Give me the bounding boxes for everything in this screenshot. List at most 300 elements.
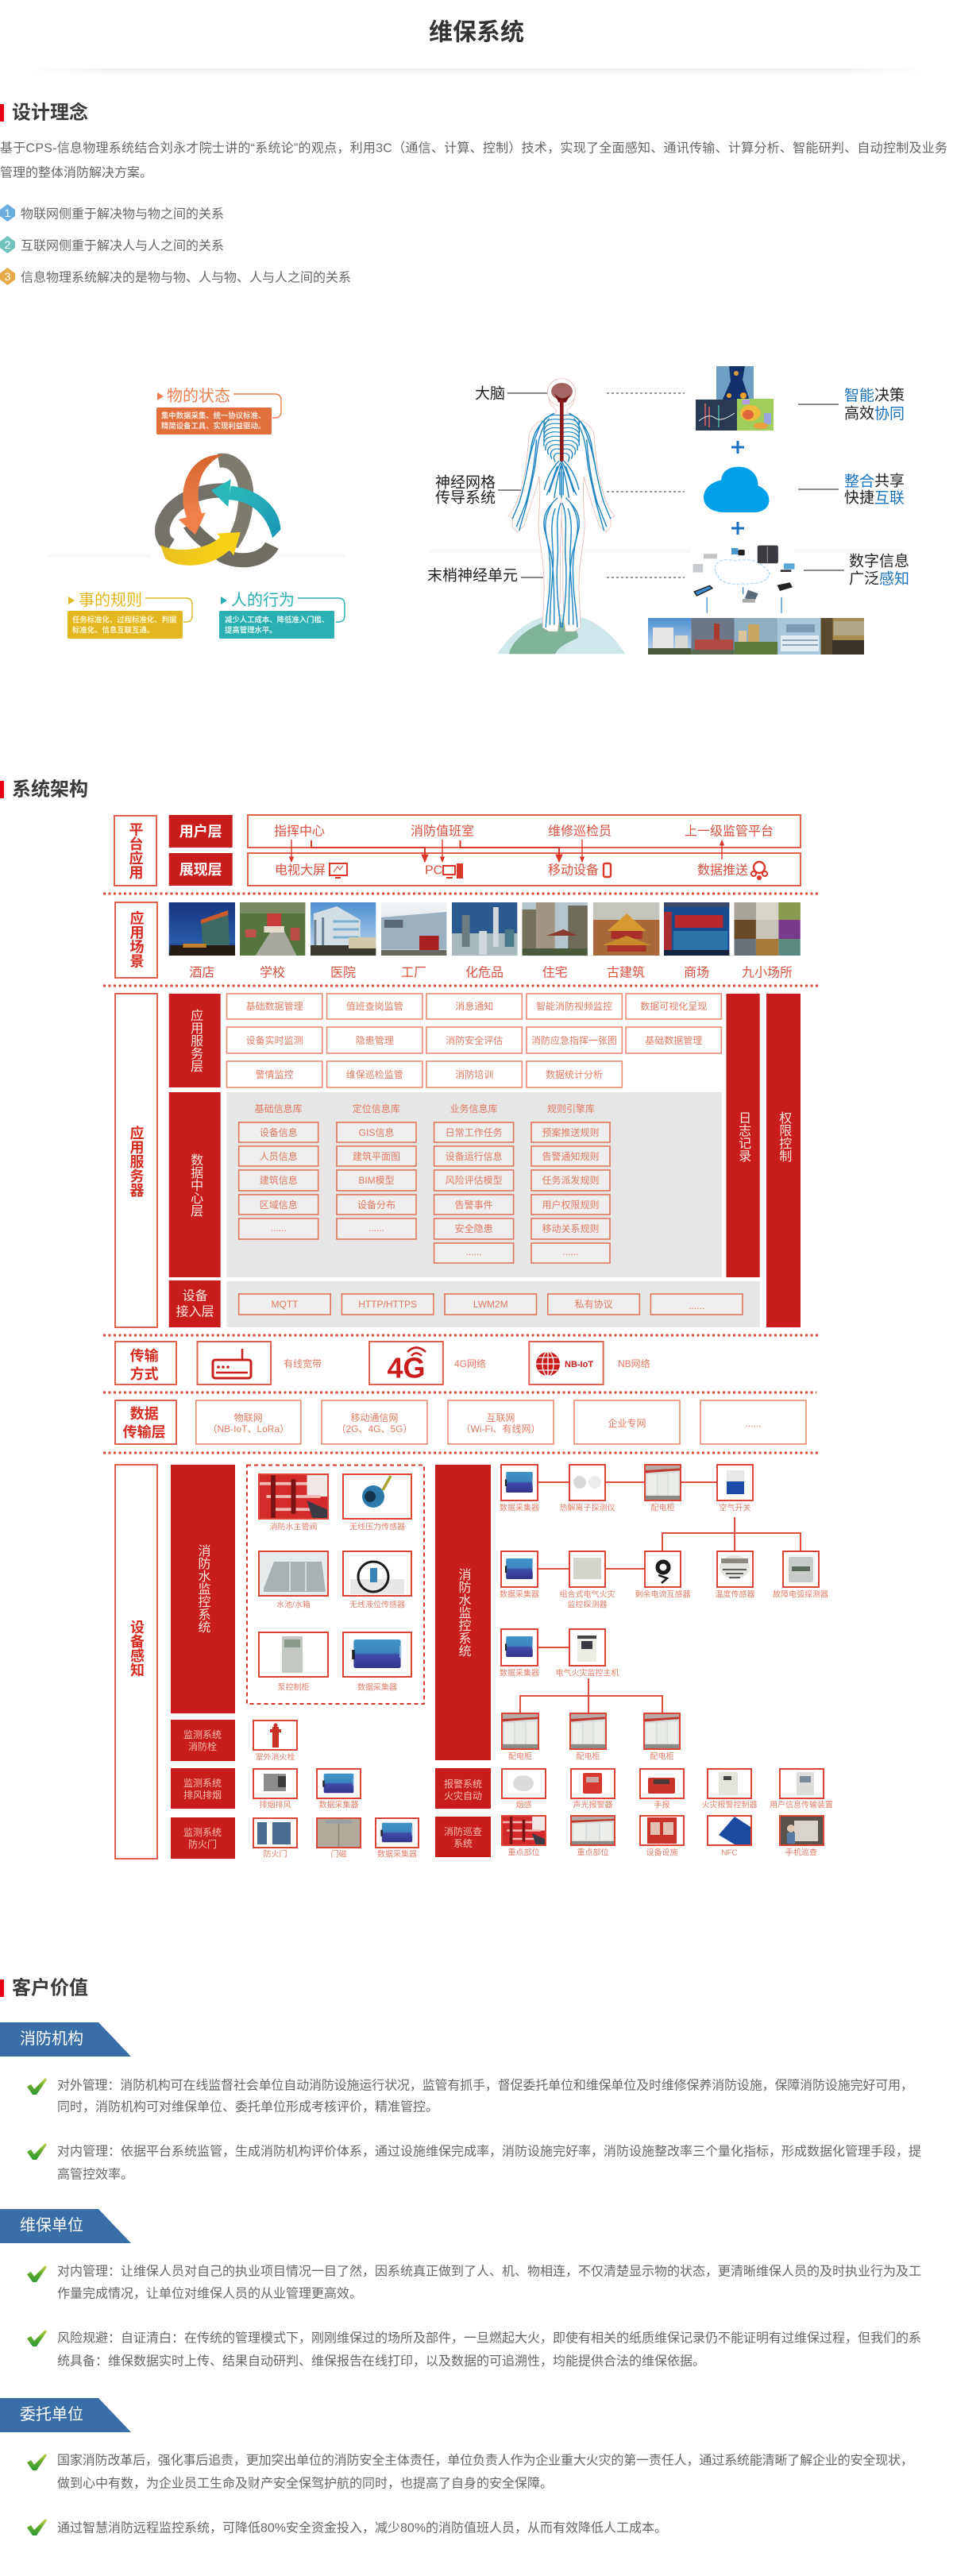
callout: 物的状态 [156, 387, 281, 434]
device: 消防水主管阀: 消防水主管阀 [270, 1522, 318, 1531]
device: 防火门: 防火门 [264, 1849, 287, 1859]
intro paragraph [0, 140, 947, 180]
right column: 消防巡查系统: 消防巡查 [444, 1825, 482, 1837]
item: 国家消防改革: 做到心中有数，为企业员工生命及财产安全保驾护航的同时，也提高了自身的安全保障。 [57, 2477, 553, 2491]
device: 声光报警器 [571, 1769, 615, 1809]
device: 用户信息传输装置: 用户信息传输装置 [770, 1800, 833, 1809]
column: 定位信息库: 定位信息库 [353, 1103, 400, 1114]
icon: analytics image cluster [696, 366, 774, 431]
label: 数字信息 广泛感知: 数字信息 [849, 553, 909, 570]
protocol panel: MQTT [272, 1299, 299, 1310]
icon: mobile device [604, 863, 611, 877]
service modules: 设备实时监测 [246, 1034, 303, 1046]
photo: 古建筑: 古建筑 [607, 966, 645, 980]
panel: 应用服务器 [115, 994, 801, 1327]
device: 数据采集器 [500, 1551, 539, 1600]
bar: 日志记录: 日志记录 [736, 1111, 751, 1162]
icon: plus 1 [731, 441, 744, 454]
icon: data push [751, 862, 767, 880]
network: 移动通信网: （2G、4G、5G） [336, 1423, 413, 1435]
section heading: 设计理念: 设计理念 [12, 102, 88, 124]
device: 手机巡查: 手机巡查 [785, 1848, 817, 1857]
tag: 委托单位 [0, 2398, 131, 2432]
label: 平台应用: 平台应用 [127, 822, 143, 880]
layer: 设备接入层: 接入层 [176, 1304, 214, 1319]
callout: 事的规则 [68, 591, 192, 639]
device: NFC: NFC [721, 1849, 738, 1857]
column: 规则引擎库: 移动关系规则 [542, 1222, 600, 1234]
item: 国家消防改革: 国家消防改革后，强化事后追责，更加突出单位的消防安全主体责任，单位负责人作为企业重大火灾的第一责任人，通过系统能清晰了解企业的安全现状， [57, 2453, 913, 2467]
user row: 维修巡检员 [548, 825, 612, 839]
device: 重点部位: 重点部位 [577, 1848, 608, 1857]
label: 传输方式: 传输 [130, 1347, 159, 1364]
protocol panel: 私有协议 [575, 1298, 613, 1310]
label: 传输方式: 方式 [130, 1365, 159, 1382]
photo: 化危品: 化危品 [465, 966, 504, 980]
device: 温度传感器: 温度传感器 [715, 1589, 754, 1600]
item: 风险规避 [27, 2330, 921, 2369]
device: 热解离子探测仪: 热解离子探测仪 [559, 1503, 615, 1512]
item: 对外管理: 同时，消防机构可对维保单位、委托单位形成考核评价，精准管控。 [57, 2100, 438, 2114]
device: 泵控制柜 [259, 1632, 328, 1692]
display row: 移动设备 [548, 863, 599, 877]
service modules: 基础数据管理 [645, 1034, 702, 1046]
illustration: human body with nerve network [508, 379, 615, 631]
photo: 九小场所: 九小场所 [742, 966, 793, 980]
layer: 用户层 [169, 815, 233, 848]
callout: 物的状态: 精简设备工具、实现利益驱动。 [161, 421, 265, 431]
device: 声光报警器: 声光报警器 [573, 1800, 613, 1809]
icon: cloud [704, 467, 769, 512]
network: 物联网: （NB-IoT、LoRa） [207, 1423, 289, 1435]
photo: 住宅 [523, 902, 588, 980]
label: 数据传输层 [115, 1400, 176, 1444]
right column: 报警系统火灾自动: 火灾自动 [444, 1790, 482, 1802]
device: 室外消火栓: 室外消火栓 [256, 1752, 295, 1762]
callout: 物的状态: 集中数据采集、统一协议标准、 [161, 411, 265, 419]
device: 设备设施: 设备设施 [646, 1848, 678, 1857]
device: 防火门 [253, 1818, 297, 1859]
right column: 报警系统火灾自动: 报警系统 [444, 1778, 482, 1790]
list item 3: 信息物理系统解决的是物与物、人与物、人与人之间的关系 [21, 270, 351, 284]
left column: 监测系统消防栓: 消防栓 [188, 1740, 217, 1752]
column: 业务信息库 [434, 1103, 514, 1263]
network: 互联网: 互联网 [486, 1412, 515, 1423]
label: 设备感知 [115, 1465, 157, 1859]
photo: 商场 [664, 902, 729, 980]
protocol panel: HTTP/HTTPS [358, 1299, 417, 1310]
service modules: 消息通知 [455, 1000, 493, 1012]
column: 基础信息库: ...... [271, 1222, 287, 1234]
device: 数据采集器 [343, 1632, 411, 1692]
network: 互联网: （Wi-Fi、有线网） [461, 1423, 540, 1435]
service modules: 消防应急指挥一张图 [531, 1034, 617, 1046]
bar: 权限控制: 权限控制 [777, 1111, 792, 1162]
bar: 日志记录 [726, 994, 760, 1277]
layer: 展现层: 展现层 [179, 862, 222, 878]
callout: 人的行为: 减少人工成本、降低准入门槛、 [225, 615, 329, 624]
device: 故障电弧探测器 [773, 1551, 828, 1600]
device: 手报 [640, 1769, 684, 1809]
photo: 工厂: 工厂 [401, 966, 426, 980]
device: 温度传感器 [715, 1551, 754, 1600]
layer: 数据中心层: 数据中心层 [188, 1153, 203, 1217]
intro paragraph: 管理的整体消防解决方案。 [0, 165, 152, 180]
label: 整合共享 快捷互联: 整合共享 [844, 472, 905, 489]
column: 规则引擎库: 预案推送规则 [542, 1126, 600, 1138]
item: 对内管理: 高管控效率。 [57, 2167, 133, 2181]
column: 定位信息库: 建筑平面图 [353, 1150, 400, 1162]
label: 末梢神经单元: 末梢神经单元 [427, 567, 518, 585]
item: 风险规避: 统具备：维保数据实时上传、结果自动研判、维保报告在线打印，以及数据的可追溯性，均能提供合法的维保依据。 [57, 2354, 705, 2369]
device: 数据采集器: 数据采集器 [500, 1668, 539, 1678]
callout: 物的状态: 物的状态 [167, 387, 230, 405]
diagram: human nervous system analogy [427, 366, 909, 655]
photo: 酒店: 酒店 [189, 966, 214, 980]
icon: router, wired broadband: 有线宽带 [284, 1358, 322, 1369]
device: 数据采集器: 数据采集器 [500, 1503, 539, 1512]
service modules: 数据统计分析 [546, 1068, 603, 1080]
label: 数字信息 广泛感知: 广泛感知 [849, 570, 909, 588]
device: 剩余电流互感器 [635, 1551, 691, 1600]
photo: 医院 [311, 902, 376, 980]
label: 智能决策 高效协同 [798, 386, 905, 423]
column: 业务信息库: ...... [466, 1246, 482, 1257]
label: 智能决策 高效协同: 智能决策 [844, 386, 905, 404]
device: 无线压力传感器 [343, 1474, 411, 1531]
list item 2: 互联网侧重于解决人与人之间的关系 [21, 238, 224, 253]
network: 互联网 [448, 1400, 554, 1444]
icon: PC [443, 863, 463, 879]
protocol panel: ...... [689, 1300, 704, 1311]
device: 室外消火栓 [253, 1721, 297, 1762]
device: 数据采集器: 数据采集器 [319, 1800, 359, 1809]
column: 定位信息库: BIM模型 [358, 1175, 395, 1186]
column: 定位信息库: GIS信息 [359, 1126, 394, 1138]
device: 配电柜 [644, 1713, 680, 1762]
right column: 消防巡查系统 [435, 1816, 824, 1857]
device: 无线液位传感器 [343, 1551, 411, 1609]
callout: 人的行为: 人的行为 [231, 591, 295, 609]
icon: plus 2 [731, 522, 744, 535]
panel: 应用场景 [115, 902, 801, 980]
service modules: 隐患管理 [356, 1034, 394, 1046]
device: NFC [708, 1816, 751, 1857]
device: 用户信息传输装置 [770, 1769, 833, 1809]
column: 业务信息库: 风险评估模型 [446, 1174, 503, 1186]
device: 数据采集器 [317, 1769, 361, 1809]
column: 规则引擎库: 告警通知规则 [542, 1150, 600, 1162]
device: 重点部位 [571, 1816, 615, 1857]
item: 对内管理 维保: 作量完成情况，让单位对维保人员的从业管理更高效。 [57, 2286, 362, 2300]
column: 业务信息库: 设备运行信息 [446, 1150, 503, 1162]
icon: 4G [369, 1342, 486, 1385]
device: 空气开关 [717, 1465, 753, 1512]
column: 业务信息库: 安全隐患 [455, 1222, 493, 1234]
column: 规则引擎库 [531, 1103, 610, 1263]
list item 3: 3 [5, 270, 11, 283]
label: 智能决策 高效协同: 高效协同 [844, 405, 905, 423]
panel: 平台应用 [114, 815, 801, 886]
item: 对内管理 维保 [27, 2264, 921, 2300]
device: 手机巡查 [780, 1816, 824, 1857]
device: 重点部位 [502, 1816, 546, 1857]
network: 移动通信网 [322, 1400, 427, 1444]
label: 神经网格传导系统: 传导系统 [435, 489, 496, 507]
device: 设备设施 [640, 1816, 684, 1857]
device: 剩余电流互感器: 剩余电流互感器 [635, 1589, 691, 1600]
label: 应用场景: 应用场景 [129, 910, 145, 967]
column: 基础信息库: 建筑信息 [260, 1174, 298, 1186]
label: 应用场景 [115, 902, 157, 978]
panel: 传输方式 [115, 1342, 650, 1385]
layer: 数据中心层 [169, 1092, 721, 1277]
photo: 酒店 [169, 902, 235, 980]
display row [248, 853, 801, 886]
icon: 4G: 4G [387, 1352, 426, 1384]
device: 故障电弧探测器: 故障电弧探测器 [773, 1589, 828, 1600]
list item 2: 2 [5, 238, 11, 251]
service modules: 消防安全评估 [446, 1034, 503, 1046]
left column: 监测系统消防栓: 监测系统 [183, 1729, 222, 1740]
column: 基础信息库 [239, 1103, 318, 1239]
layer: 展现层 [169, 853, 233, 886]
list item 1: 1 [5, 207, 11, 219]
panel: 数据传输层 [115, 1400, 806, 1444]
photo strip: buildings [648, 618, 864, 655]
system block: 消防水监控系统 [456, 1568, 472, 1657]
photo: 九小场所 [734, 902, 801, 980]
panel: 设备感知 [115, 1465, 833, 1859]
illustration: globe [497, 614, 625, 654]
protocol panel: LWM2M [473, 1299, 508, 1310]
left column: 监测系统排风排烟 [171, 1768, 361, 1809]
device: 数据采集器 [376, 1818, 419, 1859]
tag: 委托单位: 委托单位 [20, 2405, 83, 2423]
device: 数据采集器: 数据采集器 [377, 1849, 417, 1859]
photo: 化危品 [452, 902, 517, 980]
device: 热解离子探测仪 [559, 1465, 615, 1512]
label: 应用服务器: 应用服务器 [129, 1125, 145, 1197]
icon: 4G: 4G网络 [454, 1358, 486, 1369]
item: 对内管理 [27, 2143, 921, 2181]
display row: 数据推送 [697, 863, 748, 877]
label: 设备感知: 设备感知 [129, 1620, 145, 1677]
device: 配电柜: 配电柜 [577, 1751, 600, 1762]
item: 对内管理 维保: 对内管理：让维保人员对自己的执业项目情况一目了然，因系统真正做到了人、机、物相连，不仅清楚显示物的状态，更清晰维保人员的及时执业行为及工 [57, 2264, 921, 2278]
device: 消防水主管阀 [259, 1474, 328, 1531]
intro paragraph: 基于CPS-信息物理系统结合刘永才院士讲的“系统论”的观点，利用3C（通信、计算、控制）技术，实现了全面感知、通讯传输、计算分析、智能研判、自动控制及业务 [0, 140, 947, 156]
left column: 监测系统排风排烟: 排风排烟 [183, 1790, 222, 1801]
right column: 消防水监控系统 [435, 1465, 828, 1762]
left column: 监测系统防火门: 监测系统 [183, 1827, 222, 1838]
column: 基础信息库: 人员信息 [260, 1150, 298, 1162]
layer: 应用服务层 [169, 994, 721, 1087]
device: 火灾报警控制器: 火灾报警控制器 [702, 1800, 758, 1809]
bar: 权限控制 [766, 994, 801, 1327]
callout: 事的规则: 事的规则 [79, 591, 142, 609]
user row [248, 815, 801, 848]
arrows: user to display [291, 840, 722, 862]
device: 排烟排风 [253, 1769, 297, 1809]
device: 烟感 [502, 1769, 546, 1809]
network: 物联网: 物联网 [234, 1412, 263, 1423]
label: 整合共享 快捷互联: 快捷互联 [844, 489, 905, 507]
callout: 人的行为 [219, 591, 345, 639]
protocol panel [227, 1281, 760, 1327]
device: 水池/水箱: 水池/水箱 [276, 1600, 311, 1609]
item: 远程监控: 通过智慧消防远程监控系统，可降低80%安全资金投入，减少80%的消防值班人员，从而有效降低人工成本。 [57, 2521, 667, 2535]
icon: NB-IoT: NB-IoT [565, 1360, 593, 1369]
title: 维保系统 [429, 19, 524, 46]
device: 火灾报警控制器 [702, 1769, 758, 1809]
item: 对外管理: 对外管理：消防机构可在线监督社会单位自动消防设施运行状况，监管有抓手，督促委托单位和维保单位及时维修保养消防设施，保障消防设施完好可用， [57, 2078, 913, 2092]
device: 泵控制柜: 泵控制柜 [278, 1682, 310, 1692]
column: 业务信息库: 日常工作任务 [446, 1126, 503, 1138]
icon: tri-colour ribbon arrows [160, 454, 280, 566]
column: 基础信息库: 区域信息 [260, 1199, 298, 1211]
label: 数据传输层: 传输层 [123, 1423, 166, 1440]
device: 数据采集器: 数据采集器 [357, 1682, 397, 1692]
service modules: 数据可视化呈现 [640, 1000, 707, 1012]
user row: 上一级监管平台 [685, 825, 774, 839]
section heading: 系统架构: 系统架构 [12, 778, 88, 801]
network: 企业专网 [574, 1400, 680, 1444]
photo: 学校 [240, 902, 305, 980]
device: 排烟排风: 排烟排风 [259, 1800, 291, 1809]
tag: 维保单位: 维保单位 [20, 2216, 83, 2234]
network: more: ...... [745, 1418, 762, 1429]
device: 配电柜: 配电柜 [508, 1751, 532, 1762]
column: 定位信息库: ...... [368, 1222, 384, 1234]
right column: 消防巡查系统: 系统 [453, 1838, 473, 1849]
item: 国家消防改革 [27, 2453, 913, 2491]
icon: NB-IoT [529, 1342, 650, 1385]
photo: 商场: 商场 [684, 966, 709, 980]
device: 组合式电气火灾监控探测器 [559, 1551, 615, 1609]
label: 大脑: 大脑 [475, 384, 505, 402]
column: 定位信息库: 设备分布 [357, 1199, 395, 1211]
service modules: 值班查岗监管 [346, 1000, 403, 1012]
device: 数据采集器 [500, 1465, 539, 1512]
column: 规则引擎库: 用户权限规则 [542, 1199, 600, 1211]
column: 基础信息库: 基础信息库 [255, 1103, 303, 1114]
network: more [700, 1400, 806, 1444]
service modules: 维保巡检监管 [346, 1068, 403, 1080]
device: 配电柜: 配电柜 [650, 1751, 673, 1762]
device: 配电柜 [502, 1713, 538, 1762]
device: 配电柜 [645, 1465, 681, 1512]
service modules [227, 994, 721, 1087]
service modules: 基础数据管理 [246, 1000, 303, 1012]
device: 无线液位传感器: 无线液位传感器 [349, 1600, 405, 1609]
column: 规则引擎库: ...... [562, 1246, 579, 1257]
device: 无线压力传感器: 无线压力传感器 [349, 1522, 405, 1531]
label: 神经网格传导系统 [435, 473, 521, 507]
left column: 监测系统防火门: 防火门 [188, 1838, 217, 1850]
column: 规则引擎库: 规则引擎库 [547, 1103, 595, 1114]
layer: 设备接入层 [169, 1280, 760, 1327]
device: 数据采集器: 数据采集器 [500, 1589, 539, 1600]
photo: 工厂 [381, 902, 446, 980]
label: 应用服务器 [115, 994, 157, 1327]
label: 平台应用 [114, 816, 156, 886]
device: 烟感: 烟感 [516, 1800, 532, 1809]
label: 整合共享 快捷互联 [798, 472, 905, 507]
numbered list [0, 204, 351, 285]
callout: 事的规则: 标准化、信息互联互通。 [72, 626, 154, 634]
right column: 报警系统火灾自动 [435, 1768, 833, 1809]
data library panel [227, 1092, 721, 1277]
item: 对外管理 [27, 2078, 913, 2114]
column: 定位信息库 [337, 1103, 416, 1239]
icon: TV screen [330, 863, 347, 878]
service modules: 警情监控 [256, 1068, 294, 1080]
label: 数字信息 广泛感知 [804, 553, 909, 588]
column: 业务信息库: 业务信息库 [449, 1103, 498, 1114]
device: 门磁 [317, 1818, 361, 1859]
device: 配电柜 [570, 1713, 606, 1762]
item: 风险规避: 风险规避：自证清白：在传统的管理模式下，刚刚维保过的场所及部件，一旦燃起大火，即使有相关的纸质维保记录仍不能证明有过维保过程，但我们的系 [57, 2331, 921, 2345]
label: 传输方式 [115, 1342, 176, 1385]
tag: 维保单位 [0, 2209, 131, 2243]
device: 重点部位: 重点部位 [508, 1848, 540, 1857]
label: 神经网格传导系统: 神经网格 [435, 473, 496, 491]
user row: 指挥中心 [274, 825, 325, 839]
system block [171, 1465, 235, 1713]
label: 数据传输层: 数据 [130, 1406, 159, 1422]
left column: 消防水监控系统 [171, 1465, 424, 1713]
network: 物联网 [196, 1400, 301, 1444]
column: 规则引擎库: 任务派发规则 [542, 1174, 600, 1186]
icon: device network [693, 546, 794, 613]
device: 组合式电气火灾监控探测器: 组合式电气火灾 [559, 1589, 615, 1600]
item: 对内管理: 对内管理：依据平台系统监管，生成消防机构评价体系，通过设施维保完成率，消防设施完好率，消防设施整改率三个量化指标，形成数据化管理手段，提 [57, 2145, 921, 2159]
device: 数据采集器 [500, 1629, 539, 1678]
photo: 学校: 学校 [260, 966, 285, 980]
icon: router, wired broadband [197, 1342, 322, 1385]
left column: 监测系统消防栓 [171, 1720, 297, 1762]
layer: 用户层: 用户层 [179, 823, 222, 840]
list item 1: 物联网侧重于解决物与物之间的关系 [21, 207, 224, 221]
service modules: 智能消防视频监控 [536, 1000, 612, 1012]
callout: 人的行为: 提高管理水平。 [225, 626, 277, 634]
layer: 设备接入层: 设备 [183, 1288, 208, 1303]
service modules: 消防培训 [455, 1068, 493, 1080]
device: 组合式电气火灾监控探测器: 监控探测器 [567, 1600, 607, 1609]
left column: 监测系统排风排烟: 监测系统 [183, 1778, 222, 1789]
photo: 古建筑 [593, 902, 659, 980]
device: 门磁: 门磁 [330, 1849, 346, 1859]
device: 手报: 手报 [654, 1800, 670, 1809]
device: 电气火灾监控主机: 电气火灾监控主机 [556, 1668, 619, 1678]
user row: 消防值班室 [411, 825, 474, 839]
diagram: 物的状态 callouts and ribbon [68, 387, 345, 639]
layer: 应用服务层: 应用服务层 [188, 1008, 203, 1072]
device: 电气火灾监控主机 [556, 1629, 619, 1678]
icon: NB-IoT: NB网络 [618, 1358, 650, 1369]
column: 基础信息库: 设备信息 [260, 1126, 298, 1138]
label: 大脑 [475, 384, 547, 402]
network: 移动通信网: 移动通信网 [350, 1412, 399, 1423]
column: 业务信息库: 告警事件 [455, 1199, 493, 1211]
device: 空气开关: 空气开关 [720, 1503, 751, 1512]
section heading: 客户价值: 客户价值 [12, 1976, 88, 1999]
system block [435, 1465, 491, 1760]
system block: 消防水监控系统 [195, 1544, 211, 1633]
tag: 消防机构: 消防机构 [20, 2030, 83, 2048]
device: 水池/水箱 [259, 1551, 328, 1609]
